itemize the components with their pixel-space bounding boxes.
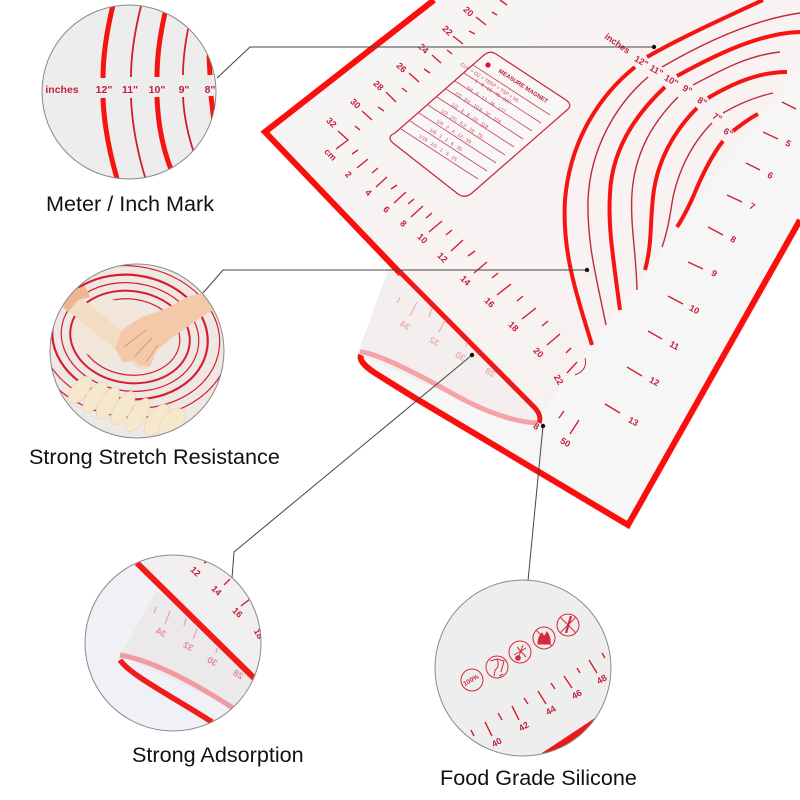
- inch arc labels: 12": [633, 54, 650, 69]
- inch arc labels: 11": [648, 63, 665, 78]
- ruler ticks: [605, 102, 796, 413]
- ruler labels: 22: [552, 373, 565, 387]
- numbers: 28: [231, 668, 245, 681]
- panel: food grade silicone: [435, 580, 620, 760]
- concentric rings: [52, 265, 220, 418]
- ruler labels: 24: [416, 41, 431, 56]
- zoom circle 1: [42, 6, 216, 178]
- icon: 100% food safe: [461, 669, 483, 691]
- circle 1 outline: [42, 5, 216, 179]
- circle 1 labels: 11": [122, 84, 138, 96]
- circle 1 labels: 8": [205, 84, 215, 96]
- icon: no knife: [557, 614, 579, 636]
- heading: strong stretch resistance: Strong Stretch Resistance: [29, 444, 280, 469]
- lower mat sheet: [358, 60, 800, 531]
- inch arc labels: inches: [603, 31, 632, 56]
- circle 1 labels: inches: [45, 84, 79, 96]
- ruler labels: 48: [595, 673, 609, 686]
- table rows: 1/16 1/2 1 3 15: [417, 134, 458, 163]
- numbers: 32: [181, 640, 195, 653]
- numbers: 16: [230, 605, 245, 620]
- leader lines: [203, 47, 654, 581]
- folded pink band: [360, 352, 537, 423]
- rolling pin: [73, 303, 143, 360]
- dough sheet: [72, 300, 148, 360]
- ruler labels: 4: [363, 187, 374, 198]
- ruler labels: 50: [558, 436, 572, 449]
- ruler labels: 42: [517, 720, 531, 733]
- numbers: 34: [154, 626, 168, 639]
- measure table: [390, 52, 570, 196]
- right hand: [115, 293, 213, 367]
- table dot: [485, 62, 491, 68]
- circle 1 labels: [45, 84, 215, 96]
- ruler labels: [627, 138, 793, 428]
- ruler labels: [322, 146, 572, 449]
- pale ticks: [154, 607, 217, 653]
- circle 2 outline: [50, 264, 224, 438]
- icon: glass and fork: [486, 656, 508, 678]
- ruler labels: 40: [490, 736, 504, 749]
- table rows: 3/4 6 12 36 177: [465, 85, 507, 115]
- ruler labels: 5: [784, 138, 793, 149]
- see-through ruler on folded flap: 32: [427, 335, 441, 348]
- leader: food grade: [528, 426, 543, 581]
- ruler labels: 8: [532, 421, 541, 432]
- numbers: [154, 564, 265, 681]
- numbers: 18: [252, 627, 265, 641]
- ruler labels: 12: [435, 250, 450, 265]
- inch arc labels: 10": [663, 73, 680, 88]
- mat area: [135, 550, 262, 677]
- folded red edge: [400, 272, 540, 423]
- ruler labels: 9: [710, 268, 719, 279]
- translucent flap: [120, 590, 255, 708]
- ruler ticks: [471, 653, 605, 736]
- heading: meter inch mark: Meter / Inch Mark: [46, 191, 214, 216]
- inch arc labels: 9": [681, 83, 694, 96]
- table title: MEASURE MAGNET: [497, 69, 549, 105]
- circle 1 labels: 10": [149, 84, 165, 96]
- ruler labels: 14: [458, 273, 473, 288]
- icon: temperature: [509, 641, 531, 663]
- finger creases: [124, 330, 158, 362]
- circle 1 labels: 9": [179, 84, 189, 96]
- red edge upper: [137, 563, 254, 678]
- heading: food grade silicone: Food Grade Silicone: [440, 765, 637, 790]
- panel: meter inch mark: [40, 0, 220, 185]
- flap pink band: [120, 655, 233, 708]
- ruler labels: 8: [398, 218, 409, 229]
- ruler labels: 20: [531, 345, 546, 360]
- centimetre ruler upper left: [324, 0, 507, 130]
- silicone mat: [260, 0, 800, 531]
- ruler labels: 22: [440, 23, 455, 38]
- ruler labels: [490, 673, 609, 749]
- inch arc labels: 6": [722, 126, 735, 139]
- table rows: 1/3 2¾ 5.3 16 79: [440, 108, 484, 140]
- leader: stretch resistance: [203, 270, 587, 293]
- icon: 100% food safe: 100%: [462, 673, 480, 688]
- inch arcs: [565, 0, 800, 345]
- ruler labels: 20: [461, 4, 476, 19]
- ruler labels: 8: [729, 234, 738, 245]
- ruler labels: 46: [570, 688, 584, 701]
- ruler labels: 10: [415, 231, 430, 246]
- centimetre ruler lower left: [322, 131, 586, 449]
- ruler labels: 2: [343, 169, 354, 180]
- ruler labels: 7: [748, 201, 757, 212]
- fold mark: [575, 358, 586, 375]
- panel: strong stretch resistance: [50, 264, 224, 438]
- table rows: 1 8 16 48 237: [473, 78, 512, 106]
- table outline: [390, 52, 570, 196]
- upper folded mat sheet: [260, 0, 800, 417]
- leader: adsorption: [232, 355, 472, 578]
- zoom circle 2: [50, 264, 224, 438]
- inch ruler right: [605, 102, 796, 428]
- see-through ruler on folded flap: [397, 297, 497, 379]
- inch arc labels: 8": [696, 95, 709, 108]
- ruler labels: 18: [506, 319, 521, 334]
- ruler ticks: [355, 0, 507, 130]
- leader: meter inch mark: [217, 47, 654, 78]
- dough pieces: [68, 376, 186, 436]
- ticks: [204, 561, 250, 606]
- inch arc labels: [603, 31, 735, 139]
- table rows: 1/8 1 2 6 30: [428, 127, 463, 153]
- table header: CUP + OZ + TBSP + TSP + ML: [459, 62, 521, 105]
- table rows: 2/3 5½ 10.6 32 158: [453, 90, 503, 126]
- ruler labels: 6: [381, 204, 392, 215]
- numbers: 14: [209, 583, 224, 598]
- circle 1 labels: 12": [96, 84, 112, 96]
- red edge lower: [120, 660, 212, 722]
- ruler labels: 10: [688, 303, 701, 316]
- see-through ruler on folded flap: 30: [453, 350, 467, 363]
- ruler labels: 11: [668, 339, 681, 352]
- mat red border: [265, 0, 800, 525]
- ruler labels: [324, 4, 476, 130]
- see-through ruler on folded flap: 28: [483, 366, 497, 379]
- ruler labels: 28: [371, 78, 386, 93]
- translucent folded flap: [358, 265, 541, 423]
- ruler labels: 12: [648, 375, 661, 388]
- inch arc labels: 7": [711, 111, 724, 124]
- ruler labels: 13: [627, 415, 640, 428]
- zoom circle 3: [85, 550, 265, 731]
- see-through ruler on folded flap: 34: [398, 319, 412, 332]
- heading: strong adsorption: Strong Adsorption: [132, 742, 304, 767]
- left hand: [63, 286, 90, 312]
- panel: strong adsorption: [85, 550, 265, 731]
- table rows: 1/2 4 8 24 118: [450, 102, 489, 130]
- circle 4 outline: [435, 580, 611, 756]
- leader dots: [470, 45, 656, 428]
- zoom circle 4: [435, 580, 620, 760]
- table grid lines: [401, 65, 550, 179]
- table rows: [417, 78, 512, 163]
- ruler labels: 30: [348, 96, 363, 111]
- ruler labels: cm: [322, 146, 339, 163]
- ruler ticks: [336, 131, 579, 434]
- ruler labels: 26: [394, 60, 409, 75]
- red corner: [540, 718, 595, 754]
- ruler labels: 6: [766, 170, 775, 181]
- circle 3 outline: [85, 555, 261, 731]
- numbers: 30: [205, 655, 219, 668]
- ruler labels: 32: [324, 115, 339, 130]
- table rows: 1/4 2 4 12 59: [435, 119, 472, 146]
- ruler labels: 16: [482, 295, 497, 310]
- ruler labels: 44: [544, 704, 558, 717]
- icon: no flame: [533, 627, 555, 649]
- numbers: 12: [188, 564, 203, 579]
